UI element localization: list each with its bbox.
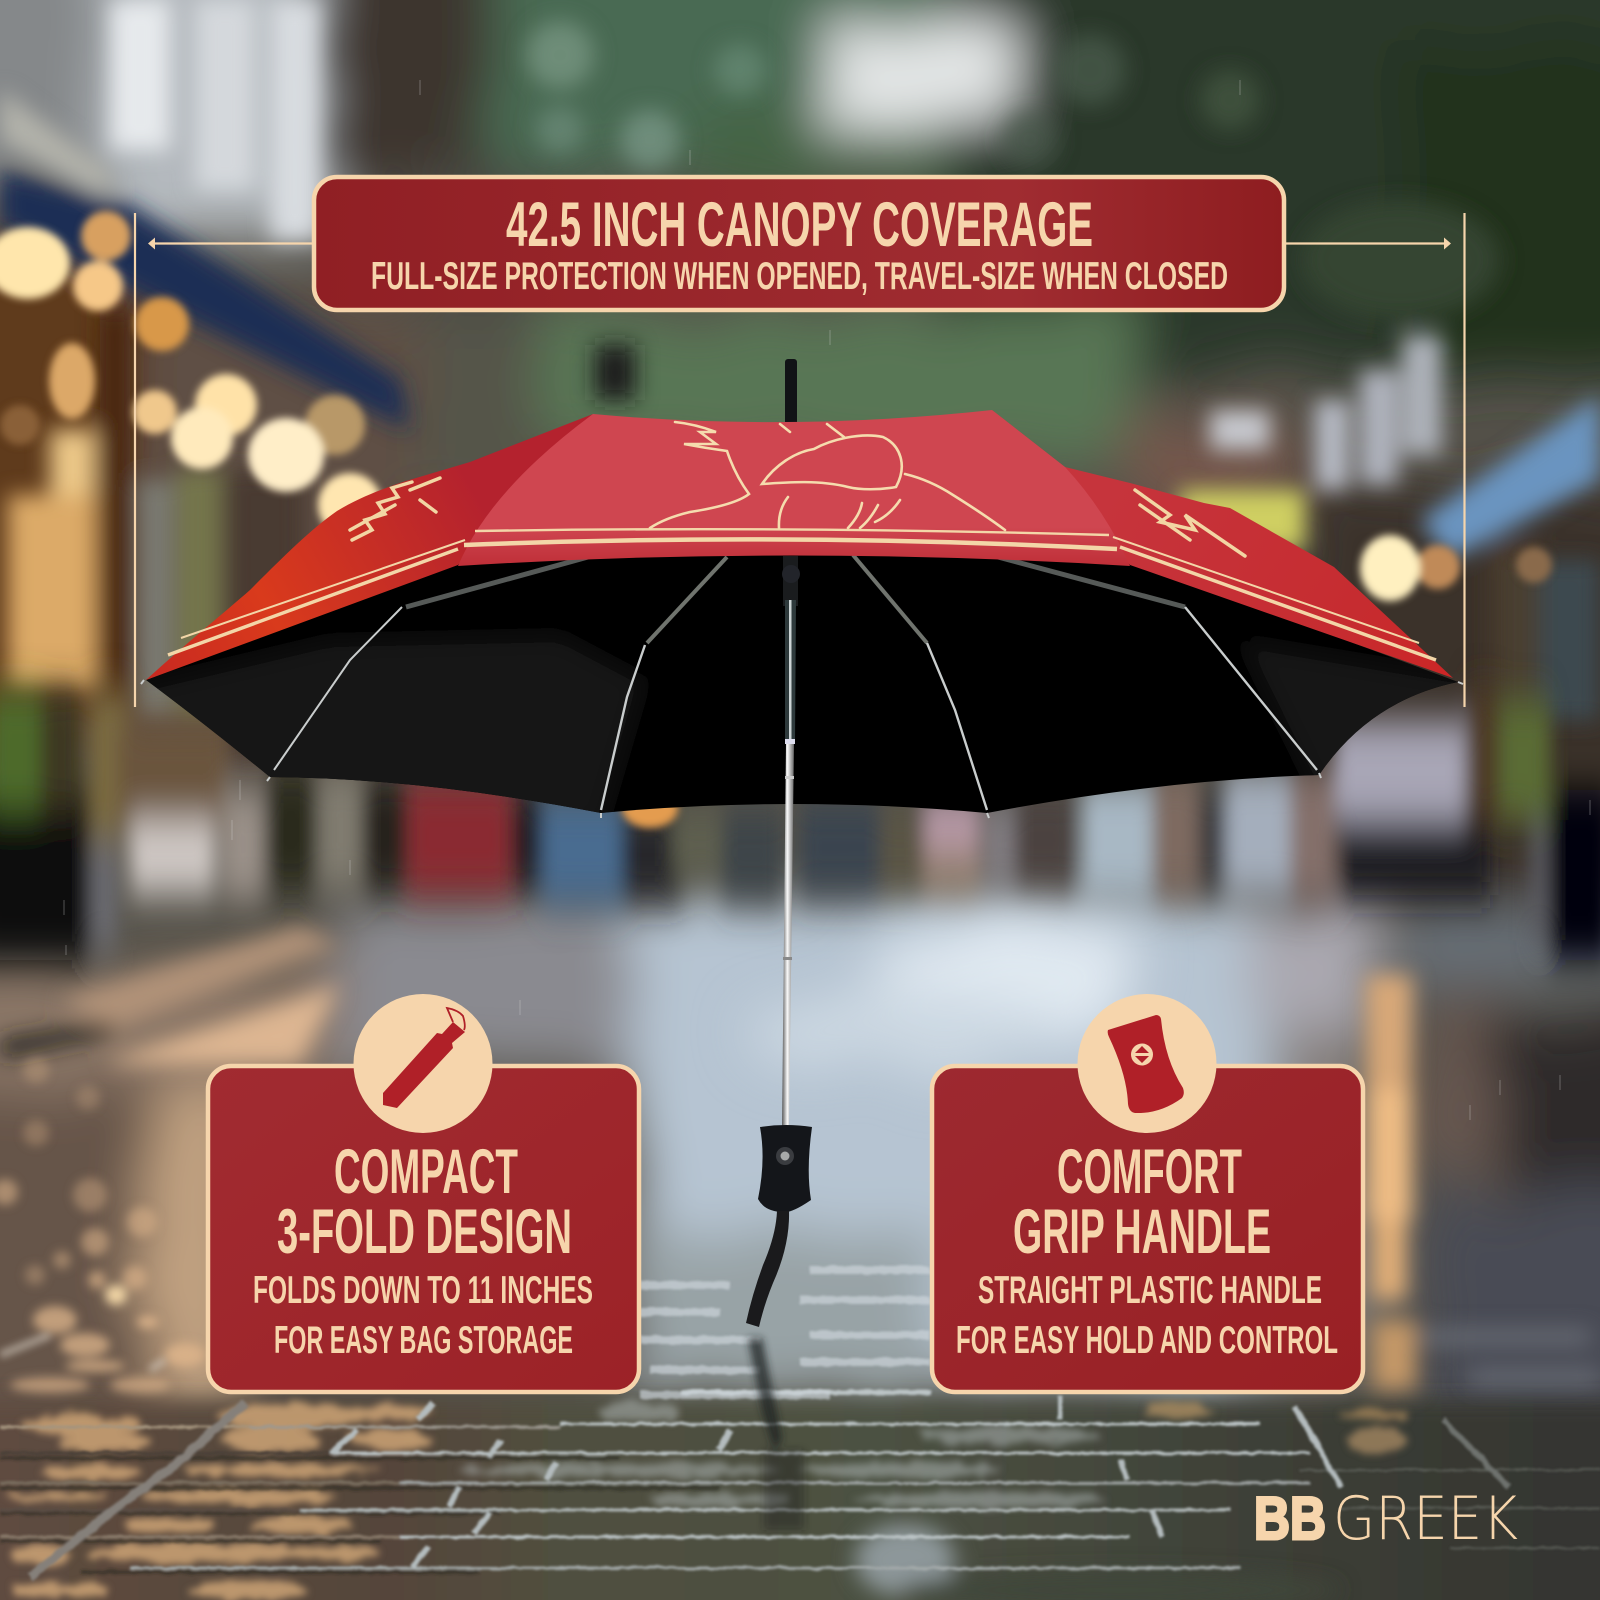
- elephant line art on canopy: [650, 422, 1005, 530]
- panel heading: [1013, 1137, 1271, 1267]
- panel description: FOR EASY BAG STORAGE: [274, 1319, 573, 1362]
- wrist strap: [746, 1211, 789, 1327]
- brand logo: GREEK: [1333, 1484, 1518, 1554]
- brand logo: [1254, 1484, 1518, 1554]
- cream stripes: [168, 529, 1436, 660]
- umbrella: [120, 359, 1480, 1327]
- wet road reflections: bokeh: [0, 1057, 205, 1393]
- icon: grip handle: [1078, 994, 1216, 1133]
- header banner: [314, 177, 1284, 310]
- rain streaks: [64, 80, 1590, 1120]
- panel description: STRAIGHT PLASTIC HANDLE: [978, 1269, 1322, 1312]
- panel description: FOR EASY HOLD AND CONTROL: [956, 1319, 1338, 1362]
- red canopy centre panel: [458, 410, 1130, 566]
- red canopy side panels: [146, 414, 593, 680]
- panel heading: GRIP HANDLE: [1013, 1197, 1271, 1267]
- panel description: FOLDS DOWN TO 11 INCHES: [253, 1269, 593, 1312]
- canopy side logos: [350, 478, 1245, 556]
- panel description: [956, 1269, 1338, 1362]
- panel: comfort grip: [932, 994, 1363, 1392]
- panel heading: COMFORT: [1057, 1137, 1242, 1207]
- panel description: [253, 1269, 593, 1362]
- wet cobblestone bricks: [0, 1270, 1600, 1600]
- brick base: [0, 1400, 1600, 1600]
- width dimension lines and arrows: [135, 213, 1464, 707]
- black underside of canopy: [146, 556, 1458, 813]
- panel heading: 3-FOLD DESIGN: [277, 1197, 572, 1267]
- shaft: [782, 556, 800, 1127]
- road: [0, 960, 340, 1090]
- banner title: 42.5 INCH CANOPY COVERAGE: [506, 190, 1093, 260]
- brand logo: BB: [1254, 1485, 1326, 1552]
- top ferrule: [785, 359, 797, 429]
- ribs: [141, 555, 1463, 818]
- panel heading: COMPACT: [334, 1137, 518, 1207]
- storefront colour columns: [0, 690, 1600, 960]
- handle reflection: [748, 1338, 804, 1530]
- folding handle: [758, 1125, 812, 1212]
- panel: compact design: [208, 994, 639, 1392]
- icon: folded umbrella: [354, 994, 492, 1133]
- panel heading: [277, 1137, 572, 1267]
- handle button: [776, 1147, 794, 1165]
